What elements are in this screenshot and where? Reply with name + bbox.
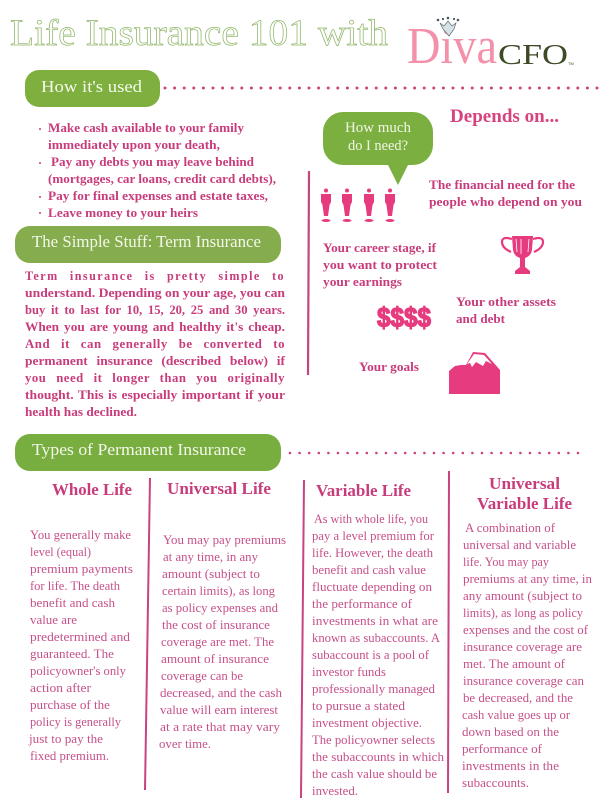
column: whole life: benefit and cash — [30, 596, 116, 610]
text: career stage: you want to protect — [323, 258, 438, 272]
title: Life Insurance 101 with — [10, 13, 389, 54]
column: variable life: life. However, the death — [312, 546, 434, 560]
column: whole life: guaranteed. The — [30, 647, 114, 661]
paragraph: term insurance — [25, 269, 286, 419]
paragraph: term insurance: health has declined. — [25, 405, 137, 419]
column: universal variable life: premiums at any time, in — [463, 572, 593, 586]
column: variable life: to pursue a stated — [312, 699, 406, 713]
bullet list: how it's used: (mortgages, car loans, credit card debts), — [48, 172, 276, 186]
column: variable life: the performance of — [312, 597, 413, 611]
heading: depends on: Depends on... — [450, 106, 559, 127]
column: universal life: Universal Life — [167, 479, 271, 498]
column: variable life: the subaccounts in which — [312, 750, 445, 764]
paragraph: term insurance: thought. This is especially important if your — [25, 388, 285, 402]
bullet list: how it's used: Pay for final expenses and estate taxes, — [48, 189, 268, 203]
bullet list: how it's used — [39, 121, 276, 220]
column: whole life: for life. The death — [30, 579, 121, 593]
column: variable life: pay a level premium for — [312, 529, 435, 543]
bullet list: how it's used: Leave money to your heirs — [48, 206, 198, 220]
icon: dollar signs: $$$$ — [377, 302, 431, 333]
paragraph: term insurance: you need it longer than you originally — [25, 371, 285, 385]
column: variable life: As with whole life, you — [314, 512, 429, 526]
column: universal variable life: insurance coverage can — [463, 674, 585, 688]
column: variable life: professionally managed — [312, 682, 436, 696]
column: universal life: certain limits), as long — [162, 584, 276, 598]
text: your goals: Your goals — [359, 360, 419, 374]
text: career stage: Your career stage, if — [323, 241, 437, 255]
column: universal life: at a rate that may vary — [160, 720, 281, 734]
paragraph: term insurance: buy it to last for 10, 15, 20, 25 and 30 years. — [25, 303, 285, 317]
dotted rule — [165, 86, 602, 90]
column: whole life: Whole Life — [52, 480, 132, 499]
column: universal life: over time. — [159, 737, 211, 751]
column: variable life: investments in what are — [312, 614, 438, 628]
icon: people — [321, 188, 395, 222]
text: financial need: people who depend on you — [429, 195, 582, 209]
column: whole life: purchase of the — [30, 698, 110, 712]
icon: mountain — [449, 352, 500, 394]
column: variable life: The policyowner selects — [312, 733, 435, 747]
column: universal life: amount of insurance — [161, 652, 269, 666]
column: whole life: fixed premium. — [30, 749, 109, 763]
paragraph: term insurance: understand. Depending on your age, you can — [25, 286, 285, 300]
column: variable life: investor funds — [312, 665, 386, 679]
column: universal life: You may pay premiums — [163, 533, 286, 547]
speech bubble: how much do I need — [323, 112, 433, 185]
column: whole life: You generally make — [30, 528, 131, 542]
text: career stage — [323, 241, 438, 289]
column: variable life: the cash value should be — [312, 767, 437, 781]
column: variable life: subaccount is a pool of — [312, 648, 430, 662]
paragraph: term insurance: Term insurance is pretty simple to — [25, 269, 285, 283]
text: other assets: Your other assets — [456, 295, 556, 309]
column: whole life: value are — [30, 613, 77, 627]
column: universal variable life: any amount (subject to — [463, 589, 582, 603]
column: whole life: level (equal) — [30, 545, 91, 559]
dotted rule — [290, 452, 580, 454]
pill heading: term insurance: The Simple Stuff: Term Insurance — [32, 232, 261, 251]
column: variable life: Variable Life — [316, 481, 411, 500]
column: universal variable life: limits), as long as policy — [463, 606, 584, 620]
column: universal variable life: life. You may pay — [463, 555, 550, 569]
logo: DivaCFO — [407, 17, 574, 75]
column: whole life: policy is generally — [30, 715, 122, 729]
logo: DivaCFO: Diva — [407, 18, 497, 75]
paragraph: term insurance: permanent insurance (described below) if — [25, 354, 286, 368]
logo: DivaCFO: CFO — [498, 39, 568, 71]
pill heading: How it's used — [25, 70, 160, 107]
text: career stage: your earnings — [323, 275, 402, 289]
column: variable life: known as subaccounts. A — [312, 631, 440, 645]
column: whole life: premium payments — [30, 562, 133, 576]
column: universal variable life: investments in the — [462, 759, 559, 773]
column: universal life: at any time, in any — [163, 550, 259, 564]
column: universal variable life: subaccounts. — [462, 776, 529, 790]
column: universal variable life: met. The amount of — [463, 657, 566, 671]
column: whole life — [28, 480, 133, 763]
paragraph: term insurance: And it can generally be converted to — [25, 337, 285, 351]
column: universal life: the cost of insurance — [162, 618, 270, 632]
pill heading: term insurance — [15, 226, 281, 263]
column: universal variable life: expenses and the cost of — [463, 623, 589, 637]
icon: trophy — [502, 236, 543, 274]
column: universal variable life: down based on the — [462, 725, 559, 739]
column: whole life: action after — [30, 681, 92, 695]
text: other assets — [456, 295, 556, 326]
column: universal life: as policy expenses and — [162, 601, 279, 615]
column: whole life: policyowner's only — [30, 664, 127, 678]
column: variable life: fluctuate depending on — [312, 580, 433, 594]
column: universal variable life: insurance coverage are — [463, 640, 582, 654]
column: universal life — [159, 479, 286, 751]
column: variable life: invested. — [312, 784, 358, 798]
text: financial need: The financial need for the — [429, 178, 575, 192]
column: universal variable life — [462, 474, 593, 790]
column: universal variable life: Variable Life — [477, 494, 572, 513]
logo: DivaCFO: TM — [568, 61, 574, 66]
column: universal variable life: A combination of — [465, 521, 556, 535]
text: financial need — [429, 178, 582, 209]
pill heading: How it's used: How it's used — [41, 77, 143, 96]
column: whole life: predetermined and — [30, 630, 131, 644]
column: universal life: value will earn interest — [160, 703, 279, 717]
column: variable life: benefit and cash value — [312, 563, 426, 577]
pill heading: permanent insurance — [15, 434, 281, 471]
column: universal life: coverage are met. The — [161, 635, 274, 649]
column: universal variable life: Universal — [489, 474, 560, 493]
column: universal variable life: cash value goes up or — [462, 708, 571, 722]
speech bubble: how much do I need: How much — [345, 120, 411, 136]
bullet list: how it's used: Make cash available to your family — [48, 121, 245, 135]
column: universal life: decreased, and the cash — [160, 686, 283, 700]
column: universal variable life: be decreased, and the — [463, 691, 573, 705]
pill heading: permanent insurance: Types of Permanent Insurance — [32, 440, 246, 459]
text: other assets: and debt — [456, 312, 506, 326]
column: variable life — [312, 481, 445, 798]
column: whole life: just to pay the — [28, 732, 103, 746]
speech bubble: how much do I need: do I need? — [348, 138, 408, 154]
paragraph: term insurance: When you are young and healthy it's cheap. — [25, 320, 285, 334]
column: universal variable life: performance of — [462, 742, 543, 756]
column: universal life: amount (subject to — [162, 567, 260, 581]
column: variable life: investment objective. — [312, 716, 422, 730]
column: universal variable life: universal and variable — [463, 538, 576, 552]
bullet list: how it's used: immediately upon your death, — [48, 138, 220, 152]
column: universal life: coverage can be — [161, 669, 243, 683]
bullet list: how it's used: Pay any debts you may leave behind — [51, 155, 254, 169]
